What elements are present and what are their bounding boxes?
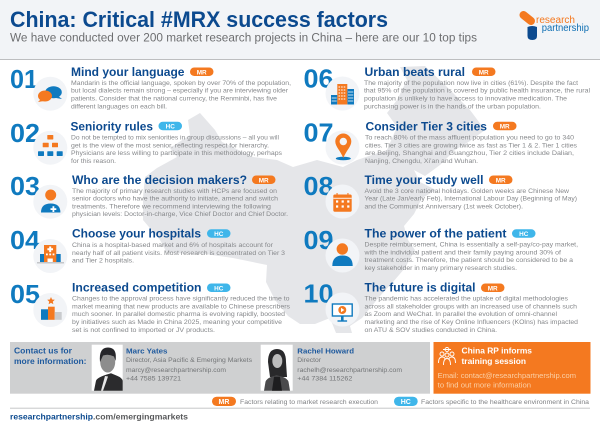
number 01: 01: [10, 64, 38, 94]
tip 05: Increased competition: [10, 279, 291, 334]
icon: patient: [326, 238, 360, 272]
footer website link: [10, 412, 189, 422]
tag MR: MR: [197, 69, 207, 76]
legend: MR: Factors relating to market research execution: [240, 399, 378, 406]
body text: by initiatives such as Made in China 2025, meaning your competitive: [72, 319, 282, 326]
heading: Urban beats rural: [364, 66, 465, 79]
body text: The pandemic has accelerated the uptake of digital methodologies: [364, 296, 569, 302]
body text: Physicians are less willing to participate in this methodology, perhaps: [71, 150, 283, 157]
tip 03: Who are the decision makers?: [10, 171, 288, 219]
number 09: 09: [304, 225, 334, 255]
logo: research partnership: [524, 15, 589, 40]
heading: Choose your hospitals: [72, 228, 201, 241]
tag MR: MR: [488, 285, 498, 292]
body text: marketing and the rise of Key Online Influencers (KOlns) has impacted: [364, 319, 578, 326]
number 08: 08: [304, 171, 334, 201]
contact heading: more information:: [14, 357, 86, 366]
legend: MR: [212, 397, 378, 406]
tag MR: [252, 176, 276, 184]
tag HC: [512, 229, 536, 238]
heading: Time your study well: [364, 174, 484, 187]
icon: hospital: [33, 239, 67, 273]
body text: [71, 134, 283, 165]
number 06: 06: [304, 64, 334, 94]
photo: Marc Yates: [92, 345, 123, 391]
body text: Avoid the 3 core national holidays. Golden weeks are Chinese New: [364, 188, 569, 195]
body text: senior doctors who have the authority to initiate, amend and switch: [72, 196, 278, 202]
tag HC: HC: [519, 231, 529, 238]
tip 07: Consider Tier 3 cities: [304, 118, 578, 165]
number 05: 05: [10, 279, 40, 309]
contact: Rachel Howard: rachelh@researchpartnership.com: [297, 367, 402, 374]
logo: research partnership: partnership: [542, 23, 589, 34]
legend: HC: [394, 397, 589, 406]
icon: city buildings: [326, 76, 360, 110]
tip 06: Urban beats rural: [304, 64, 591, 110]
icon: speech bubbles: [33, 77, 67, 111]
title: China: Critical #MRX success factors: [10, 7, 388, 32]
body text: [365, 134, 578, 165]
body text: much sooner. In parallel domestic pharma is evolving rapidly, boosted: [72, 311, 285, 318]
tip 01: Mind your language: [10, 64, 291, 111]
body text: The majority of primary research studies with HCPs are focused on: [72, 188, 277, 195]
heading: Mind your language: [71, 66, 185, 79]
contact: Marc Yates: Marc Yates: [126, 346, 168, 356]
tag MR: MR: [479, 69, 489, 76]
heading: Who are the decision makers?: [72, 174, 247, 187]
body text: The majority of the population now live in cities (61%). Despite the fact: [364, 80, 578, 87]
tag HC: [207, 284, 230, 292]
icon: hierarchy: [33, 131, 67, 165]
body text: patients. Consider that the national currency, the Renminbi, has five: [71, 96, 277, 102]
tag HC: [158, 122, 182, 130]
body text: market meaning that new products are available to Chinese prescribers: [72, 303, 291, 310]
body text: Year (Late Jan/early Feb), International Labour Day (Beginning of May): [364, 196, 577, 202]
body text: are Beijing, Shanghai and Guangzhou, Tier 2 cities include Dalian,: [365, 150, 574, 157]
tag MR: [489, 176, 512, 184]
legend: HC: HC: [401, 399, 411, 406]
body text: [363, 242, 578, 272]
heading: The future is digital: [364, 282, 476, 294]
number 10: 10: [304, 278, 334, 308]
body text: for this reason.: [71, 158, 116, 165]
body text: treatments. Therefore we recommend interviewing the following: [72, 203, 271, 210]
body text: [364, 80, 591, 110]
body text: To reach 80% of the mass affluent population you need to go to 340: [365, 134, 574, 141]
tag MR: MR: [259, 177, 269, 184]
contact: Rachel Howard: [297, 346, 402, 383]
body text: [72, 242, 285, 265]
body text: [71, 80, 291, 110]
heading: Seniority rules: [70, 120, 153, 134]
body text: Do not be tempted to mix seniorities in group discussions – all you will: [71, 134, 280, 141]
body text: Changes to the approval process have significantly reduced the time to: [72, 296, 290, 302]
body text: that 95% of the population is covered by public health insurance, the rural: [364, 88, 591, 95]
body text: physician levels: Doctor-in-charge, Vice Chief Doctor and Chief Doctor.: [72, 211, 288, 218]
contact: Marc Yates: [126, 346, 253, 383]
tag MR: MR: [496, 177, 506, 184]
tag HC: HC: [214, 231, 224, 238]
body text: [72, 188, 288, 218]
body text: treatment costs. Therefore, the patient should be considered to be a: [364, 257, 573, 264]
body text: key stakeholder in many primary research studies.: [364, 265, 517, 272]
tag HC: HC: [166, 124, 175, 130]
body text: different languages on each bill.: [71, 103, 167, 110]
body text: set is not confined to imported or JV products.: [72, 327, 215, 334]
training email: Email: contact@researchpartnership.com: [438, 371, 576, 380]
icon: group of people: [438, 348, 456, 365]
contact: Marc Yates: marcy@researchpartnership.com: [126, 367, 226, 374]
training heading: training session: [462, 356, 526, 366]
footer website link: researchpartnership: [10, 412, 93, 422]
body text: get is the view of the most senior, reflecting respect for hierarchy.: [71, 142, 269, 149]
subtitle: We have conducted over 200 market research projects in China – here are our 10 top tips: [10, 30, 477, 44]
body text: across all stakeholder groups with an increased use of channels such: [364, 303, 577, 310]
body text: [72, 296, 291, 334]
tag MR: [472, 68, 496, 76]
header band: [0, 0, 600, 60]
tip 09: The power of the patient: [304, 225, 578, 272]
contact: Rachel Howard: +44 7384 115262: [297, 376, 353, 383]
contact heading: [14, 346, 86, 366]
tag HC: HC: [214, 285, 224, 292]
body text: on ATU & SOV studies conducted in China.: [364, 327, 497, 334]
body text: Nanjing, Chengdu, Xi’an and Wuhan.: [365, 158, 478, 165]
body text: [364, 296, 578, 334]
contact: Rachel Howard: Rachel Howard: [297, 346, 354, 356]
body text: Mandarin is the official language, spoken by over 70% of the population,: [71, 80, 291, 87]
panel: contact details: [10, 342, 430, 394]
icon: doctor: [33, 185, 67, 219]
training email: to find out more information: [438, 380, 531, 390]
footer website link: .com/emergingmarkets: [93, 412, 189, 422]
tag MR: [190, 68, 214, 76]
tip 02: Seniority rules: [10, 118, 283, 165]
contact: Marc Yates: +44 7585 139721: [126, 376, 181, 383]
training email: [438, 371, 576, 390]
body text: China is a hospital-based market and 6% of hospitals account for: [72, 242, 274, 249]
body text: nearly half of all patient visits. Most research is concentrated on Tier 3: [72, 250, 285, 257]
icon: bar chart with star: [33, 293, 67, 327]
heading: The power of the patient: [364, 228, 507, 241]
background map of China: [143, 66, 485, 333]
body text: [364, 188, 577, 210]
number 02: 02: [10, 118, 40, 148]
tip 08: Time your study well: [304, 171, 577, 218]
icon: calendar: [326, 184, 360, 218]
body text: and the Communist Anniversary (1st week October).: [364, 203, 523, 210]
contact heading: Contact us for: [14, 346, 72, 356]
training heading: China RP informs: [462, 346, 532, 356]
body text: with the individual patient and their family paying around 30% of: [363, 250, 561, 256]
tip 04: Choose your hospitals: [10, 225, 285, 273]
contact: Rachel Howard: Director: [297, 357, 322, 364]
heading: Increased competition: [72, 282, 202, 295]
body text: but local dialects remain strong – especially if you are interviewing older: [71, 88, 289, 95]
body text: Despite reimbursement, China is essentially a self-pay/co-pay market,: [364, 242, 578, 248]
tag MR: [481, 284, 504, 292]
panel: training session: [434, 342, 590, 394]
photo: Rachel Howard: [261, 345, 293, 391]
icon: map pin: [326, 130, 360, 164]
body text: population is unlikely to have access to innovative medication. The: [364, 96, 567, 102]
tag MR: MR: [500, 124, 510, 130]
number 04: 04: [10, 225, 41, 255]
logo: research partnership: research: [536, 15, 575, 26]
number 03: 03: [10, 171, 40, 201]
legend: MR: MR: [219, 399, 229, 406]
icon: video monitor: [326, 292, 360, 326]
tag HC: [207, 229, 230, 238]
training heading: [462, 346, 532, 366]
legend: HC: Factors specific to the healthcare environment in China: [421, 399, 589, 406]
heading: Consider Tier 3 cities: [366, 120, 487, 134]
contact: Marc Yates: Director, Asia Pacific & Emerging Markets: [126, 357, 253, 364]
number 07: 07: [304, 118, 334, 148]
body text: and Tier 2 hospitals.: [72, 258, 134, 265]
tip 10: The future is digital: [304, 278, 578, 334]
tag MR: [493, 122, 516, 130]
body text: as Zoom and WeChat. In parallel the evolution of omni-channel: [364, 311, 558, 318]
body text: purchasing power is in the hands of the urban population.: [364, 103, 541, 110]
body text: cities. Tier 3 cities are growing twice as fast as Tier 1 & 2. Tier 1 cities: [365, 142, 578, 149]
